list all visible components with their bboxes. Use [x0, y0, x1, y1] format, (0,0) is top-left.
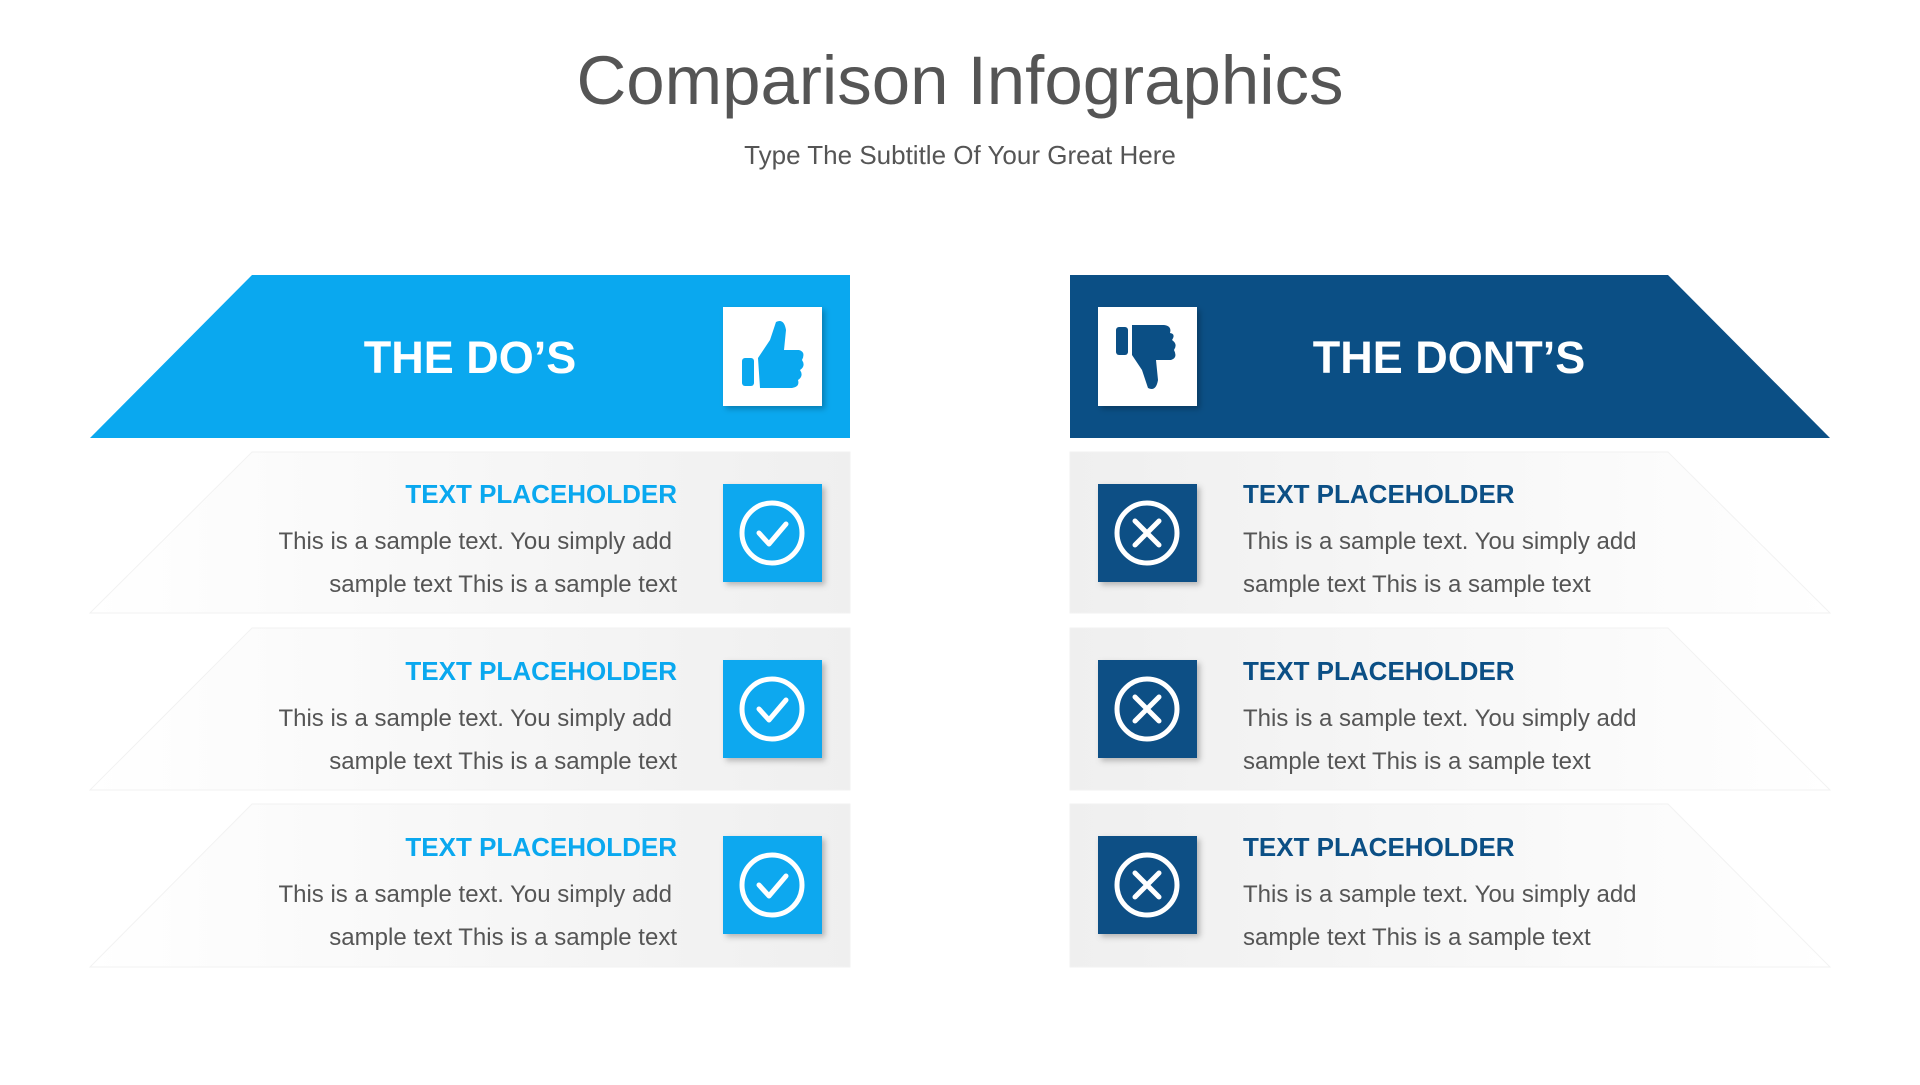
- row 3 dont: [1070, 804, 1830, 967]
- header: don'ts: [1070, 275, 1830, 438]
- row 2 dont: This is a sample text. You simply add: [1243, 705, 1637, 732]
- row 1 dont: [1070, 452, 1830, 613]
- row 1 do: sample text This is a sample text: [329, 571, 677, 598]
- row 1 do: [90, 452, 850, 613]
- row 3 dont: This is a sample text. You simply add: [1243, 881, 1637, 908]
- row 3 dont: sample text This is a sample text: [1243, 924, 1591, 951]
- row 1 dont: TEXT PLACEHOLDER: [1243, 479, 1515, 509]
- row 2 do: sample text This is a sample text: [329, 748, 677, 775]
- row 3 do: This is a sample text. You simply add: [278, 881, 672, 908]
- row 2 do: This is a sample text. You simply add: [278, 705, 672, 732]
- panel: don'ts: [1070, 275, 1830, 967]
- row 2 dont: [1070, 628, 1830, 790]
- icon: check: [723, 660, 822, 758]
- icon: thumbs down: [1098, 307, 1197, 406]
- header: don'ts: THE DONT’S: [1313, 332, 1585, 383]
- icon: cross: [1098, 484, 1197, 582]
- header: do's: [90, 275, 850, 438]
- subtitle: Type The Subtitle Of Your Great Here: [744, 140, 1176, 170]
- row 3 dont: TEXT PLACEHOLDER: [1243, 832, 1515, 862]
- row 2 dont: sample text This is a sample text: [1243, 748, 1591, 775]
- panel: do's: [90, 275, 850, 967]
- row 1 do: This is a sample text. You simply add: [278, 528, 672, 555]
- icon: thumbs up: [723, 307, 822, 406]
- icon: cross: [1098, 660, 1197, 758]
- icon: cross: [1098, 836, 1197, 934]
- row 1 dont: sample text This is a sample text: [1243, 571, 1591, 598]
- row 3 do: sample text This is a sample text: [329, 924, 677, 951]
- row 2 dont: TEXT PLACEHOLDER: [1243, 656, 1515, 686]
- row 2 do: [90, 628, 850, 790]
- title: Comparison Infographics: [576, 42, 1344, 119]
- row 3 do: TEXT PLACEHOLDER: [405, 832, 677, 862]
- icon: check: [723, 484, 822, 582]
- row 1 dont: This is a sample text. You simply add: [1243, 528, 1637, 555]
- icon: check: [723, 836, 822, 934]
- header: do's: THE DO’S: [364, 332, 576, 383]
- row 1 do: TEXT PLACEHOLDER: [405, 479, 677, 509]
- row 3 do: [90, 804, 850, 967]
- row 2 do: TEXT PLACEHOLDER: [405, 656, 677, 686]
